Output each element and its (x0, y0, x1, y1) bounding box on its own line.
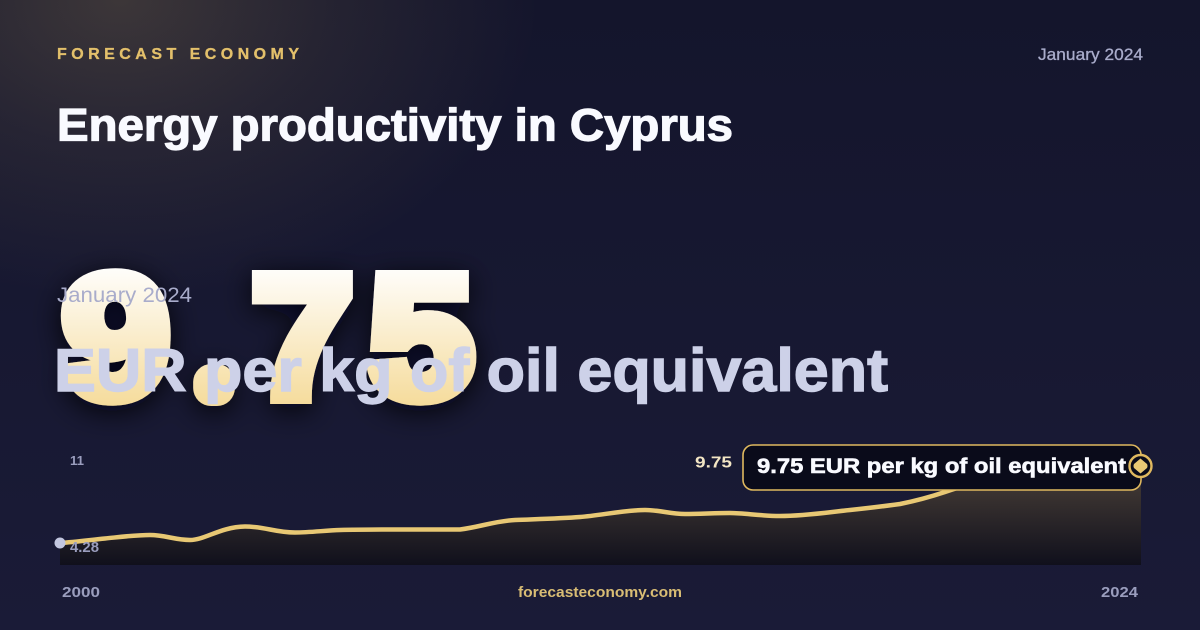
start point (54, 538, 66, 548)
big value 9.75: 9 (62, 240, 170, 434)
x axis start year: 2000 (62, 584, 100, 601)
date overlay: January 2024 (57, 284, 192, 307)
trend line (60, 478, 1000, 543)
website: forecasteconomy.com (518, 584, 682, 601)
line chart (54, 466, 1141, 565)
big value 9.75: 7 (252, 240, 353, 434)
brand label: FORECAST ECONOMY (57, 46, 299, 63)
latest point marker (1130, 455, 1152, 477)
big value 9.75: 5 (369, 240, 474, 434)
latest value label: 9.75 (695, 454, 732, 472)
callout (743, 445, 1141, 490)
date top right: January 2024 (1038, 46, 1143, 64)
big value 9.75: . (208, 353, 220, 397)
unit subtitle: EUR per kg of oil equivalent (54, 337, 888, 404)
area under line (60, 466, 1141, 565)
x axis end year: 2024 (1101, 584, 1139, 601)
callout: 9.75 EUR per kg of oil equivalent (757, 454, 1126, 478)
axis min label: 4.28 (70, 540, 99, 556)
axis max label: 11 (70, 453, 84, 468)
big value 9.75 (62, 240, 474, 434)
title: Energy productivity in Cyprus (57, 100, 733, 150)
